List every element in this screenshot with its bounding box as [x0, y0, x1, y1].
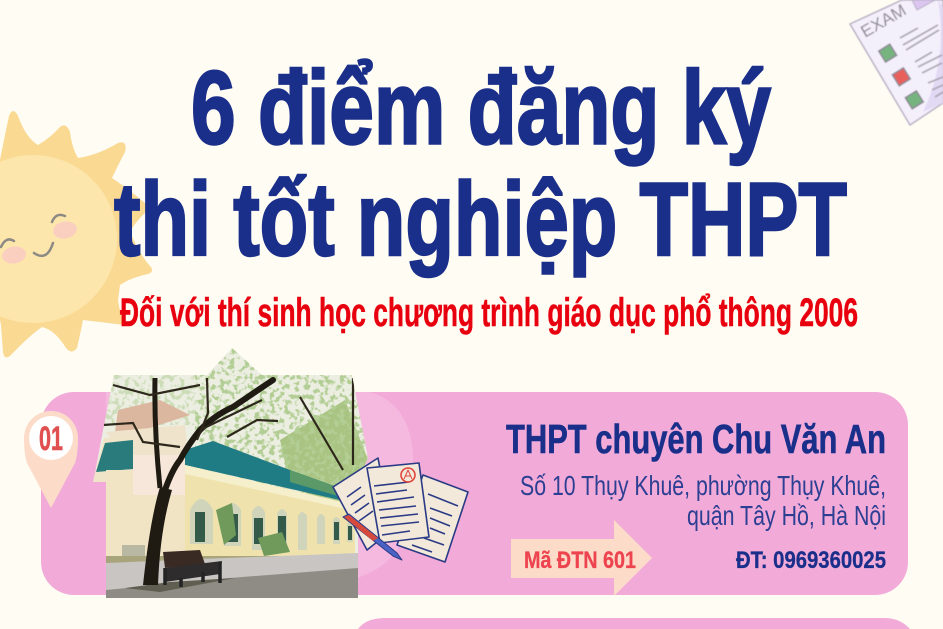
bench: [163, 550, 205, 568]
icon: exam sheet: EXAM: [858, 1, 909, 41]
phone number: ĐT: 0969360025: [736, 547, 886, 574]
school address: quận Tây Hồ, Hà Nội: [687, 500, 886, 531]
tree: [143, 487, 172, 585]
icon: exam papers and pen: [333, 458, 468, 562]
school photo: [90, 345, 370, 600]
icon: location pin 01: 01: [39, 420, 63, 458]
title: [114, 50, 847, 278]
arrow: exam site code: [511, 520, 652, 596]
icon: smiling sun: [0, 111, 152, 357]
panel: school 01 card: [24, 345, 908, 600]
panel: second school card: [358, 618, 910, 629]
school address: [520, 470, 886, 531]
icon: exam sheet: [850, 0, 943, 125]
icon: location pin 01: [24, 411, 78, 508]
arcade windows: [190, 499, 353, 550]
arrow: exam site code: Mã ĐTN 601: [524, 547, 636, 574]
title: 6 điểm đăng ký: [191, 50, 771, 166]
